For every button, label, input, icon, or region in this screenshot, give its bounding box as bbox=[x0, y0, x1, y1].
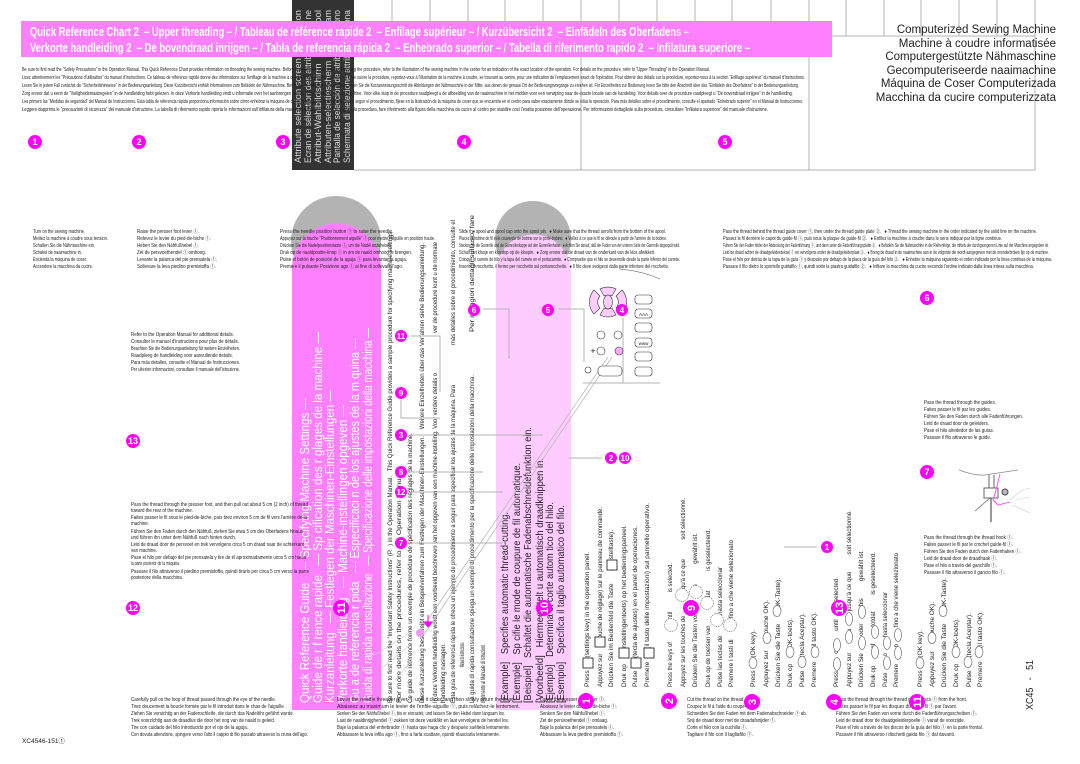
step numbers: rotated circles: 13 bbox=[834, 602, 846, 614]
step numbers: rotated circles: 4 bbox=[829, 698, 841, 705]
step 7 text: Passare il filo attraverso il gancio filo ①. bbox=[924, 568, 1005, 576]
operation panel illustration: + bbox=[590, 346, 596, 356]
rotated text: settings key: Druk op (instellingentoets) op het bedieningspaneel. bbox=[621, 525, 628, 687]
step 4 text: Coloque el carrete de hilo y la tapa del carrete en el portacarrete. ● Compruebe que el hilo se desenrolle desde la parte inferior del carrete. bbox=[459, 257, 680, 263]
callout numbers on illustration: 8 bbox=[399, 468, 404, 477]
rotated text: OK key second block: Druk op (OK-toets). bbox=[953, 618, 960, 687]
step 2 text: Zet de persvoethendel ① omhoog. bbox=[137, 248, 206, 256]
step numbers: rotated circles: 3 bbox=[747, 699, 759, 705]
step numbers: upright circles: 2 bbox=[136, 137, 142, 147]
rotated text: dial keys: Appuyez sur les touches de jusqu'à ce que soit sélectionné. bbox=[680, 498, 687, 687]
rotated text: OK key second block bbox=[917, 578, 984, 687]
operation manual note: Consulter le manuel d'instructions pour plus de détails. bbox=[131, 339, 239, 345]
step 6 text: Führen Sie den Faden durch alle Fadenführungen. bbox=[924, 414, 1023, 420]
step 1 text: Schakel de naaimachine in. bbox=[33, 250, 82, 256]
thread path arrow marker bbox=[375, 615, 432, 680]
callout numbers on illustration: 2 bbox=[609, 454, 614, 463]
callout numbers on illustration: 5 bbox=[546, 306, 551, 315]
rotated text: OK key second block: Pulse (tecla Aceptar). bbox=[966, 613, 973, 687]
step 13 text: Faites passer le fil sous le pied-de-biche, puis tirez environ 5 cm de fil vers l'arrière de la bbox=[131, 515, 307, 521]
title banner: Verkorte handleiding 2 – De bovendraad inrijgen – / Tabla de referencia rápida 2 – Enhebrado superior – / Tabella di riferimento rapido 2 – Infilatura superiore – bbox=[30, 41, 750, 55]
needle threader text bbox=[337, 695, 520, 738]
thread cutter text bbox=[687, 695, 807, 738]
light pink pill with grey arc: example: [Example] Specifies automatic thread-cutting. bbox=[499, 512, 511, 703]
rotated text: dial keys: Pulse las teclas de hasta seleccionar bbox=[717, 566, 724, 687]
presser foot lever text: Abbassare la leva piedino premistoffa ①. bbox=[540, 730, 623, 738]
rotated introduction text bbox=[387, 215, 487, 703]
step 1 text: Encienda la máquina de coser. bbox=[33, 257, 87, 263]
step 2 text: Levante la palanca del pie prensatela ①. bbox=[137, 255, 217, 263]
rotated text: arrow keys: Drücken Sie oder bis gewählt ist. bbox=[858, 550, 865, 687]
step 2 text: Relevez le levier du pied-de-biche ①. bbox=[137, 234, 211, 242]
step 1 text bbox=[33, 229, 108, 270]
callout numbers on illustration: 12 bbox=[397, 488, 406, 497]
rotated text: arrow keys: Druk op of totdat is geselecteerd. bbox=[870, 552, 877, 687]
needle threader text: Laat de naaldinrijghendel ① zakken tot deze vastklikt en laat vervolgens de hendel los. bbox=[337, 716, 509, 724]
machine title: Computerized Sewing Machine bbox=[897, 24, 1056, 36]
rotated text: OK key first block: Druk op (OK-toets). bbox=[787, 618, 794, 687]
machine title: Máquina de Coser Computerizada bbox=[881, 78, 1057, 90]
rotated text: arrow keys: Press or until selected. bbox=[833, 577, 840, 687]
step 12 text: Trek voorzichtig aan de draadlus die door het oog van de naald is geleid. bbox=[131, 718, 275, 724]
step 6 text bbox=[924, 400, 1023, 441]
step 3 text: Appuyez sur la touche “Positionnement aiguille” ① pour mettre l'aiguille en position haute. bbox=[280, 234, 435, 242]
step 13 text bbox=[131, 502, 309, 581]
needle threader text: Senken Sie den Nähfußhebel ①, bis er einrastet, und lassen Sie den Hebel dann langsam los. bbox=[337, 709, 505, 717]
rotated introduction text: Manual de instrucciones. bbox=[459, 642, 466, 667]
pink pill with grey arc: machine settings: Guide de r f rence rapide — Sp cification des r glages de la machine — bbox=[310, 332, 325, 703]
crop grid lines bbox=[354, 0, 1035, 170]
presser foot lever text: Zet de persvoethendel ① omlaag. bbox=[540, 716, 608, 724]
pink pill with grey arc: machine settings: Guida di rapida consultazione — Specificazione delle impostazioni della macchina — bbox=[360, 328, 375, 703]
step 1 text: Turn on the sewing machine. bbox=[33, 229, 85, 235]
operation manual note bbox=[131, 332, 240, 373]
step 4 text: Stecken Sie die Garnrolle und die Garnrollenkappe auf den Garnrollenhalter. ● Achten Sie darauf, daß der Faden von der unteren Seite der Garnrolle abgespult wird. bbox=[459, 243, 680, 249]
callout numbers on illustration: 1 bbox=[825, 543, 830, 552]
step 2 text: Sollevare la leva piedino premistoffa ①. bbox=[137, 262, 216, 270]
intro text: Be sure to first read the “Safety Precautions” in the Operation Manual. This Quick Reference Chart provides information on threading the sewing machine. Before threading the machine and following the procedure, refer to the illustration of the sewing machine in the center for an indication of the exact location of the operation. For details on the procedure, refer to “Upper Threading” in the Operation Manual. bbox=[22, 67, 710, 73]
operation manual note: Per ulteriori informazioni, consultare il manuale dell'istruzione. bbox=[131, 367, 240, 373]
needle threader text: Abbassare la leva infila ago ①, fino a farla scattare, quindi rilasciarla lentamente. bbox=[337, 730, 500, 738]
step 5 text: Passez le fil derrière le capot du guide-fil ①, puis sous la plaque du guide-fil ②. ● Enfilez la machine à coudre dans le sens indiqué par la ligne continue. bbox=[723, 234, 1002, 242]
step 3 text: Drücken Sie die Nadelpositionstaste ①, um die Nadel anzuheben. bbox=[280, 241, 392, 249]
step 4 text: Placez la bobine de fil et le couvercle de bobine sur le porte-bobine. ● Veillez à ce que le fil se déroule à partir de l'arrière de la bobine. bbox=[459, 236, 667, 242]
step 7 text: Pase el hilo a través del ganchillo ①. bbox=[924, 561, 997, 569]
step numbers: upright circles: 5 bbox=[722, 137, 728, 147]
step 13 text: Passare il filo attraverso il piedino premistoffa, quindi tirarlo per circa 5 cm verso la parte bbox=[131, 569, 309, 575]
rotated introduction text: For more details on the procedures, refer to the Operation Manual. bbox=[396, 470, 403, 703]
rotated introduction text: Per maggiori dettagli sull'uso, fare bbox=[469, 215, 476, 332]
rotated text: arrow keys bbox=[833, 510, 900, 687]
machine title: Macchina da cucire computerizzata bbox=[876, 92, 1057, 104]
step 7 text: Faites passer le fil par le crochet guide-fil ①. bbox=[924, 540, 1013, 548]
step 13 text: Pass the thread through the presser foot, and then pull out about 5 cm (2 inch) of thread bbox=[131, 502, 308, 508]
operation manual note: Refer to the Operation Manual for additional details. bbox=[131, 332, 234, 338]
step numbers: upright circles: 4 bbox=[461, 137, 467, 147]
step 13 text: van machine. bbox=[131, 548, 157, 554]
icons: settings key bbox=[583, 560, 654, 668]
pink pill with grey arc: machine settings: Gu a de referencia r pida — Especificaci n de los ajustes de la m quina — bbox=[347, 338, 362, 703]
thread cutter text: Tagliare il filo con il tagliafilo ①. bbox=[687, 730, 753, 738]
callout numbers on illustration: 4 bbox=[620, 306, 625, 315]
step numbers: upright circles: 6 bbox=[924, 293, 930, 303]
step 13 text: und führen ihn unter dem Nähfuß nach hinten durch. bbox=[131, 535, 236, 541]
step 6 text: Faites passer le fil par les guides. bbox=[924, 407, 991, 413]
step numbers: rotated circles: 1 bbox=[581, 698, 593, 704]
thread guide discs text: Führen Sie den Faden von vorne durch die Fadenführungsscheiben ①. bbox=[836, 709, 977, 717]
step 13 text: toward the rear of the machine. bbox=[131, 508, 193, 514]
rotated text: OK key first block: Drücken Sie die Taste (OK-Taste). bbox=[775, 578, 782, 687]
pink pill with grey arc: machine settings: Kurzanleitung — Festlegen der Maschinen-Einstellungen — bbox=[322, 390, 337, 703]
rotated text: OK key first block: Premere (il tasto OK). bbox=[811, 612, 818, 687]
connector lines bbox=[401, 309, 817, 636]
rotated text: OK key first block: Press (OK key). bbox=[750, 630, 757, 687]
step 5 text bbox=[723, 227, 1052, 270]
icons: arrow keys bbox=[834, 606, 902, 670]
operation manual note: Beachten Sie die Bedienungsanleitung für weitere Einzelheiten. bbox=[131, 346, 240, 352]
thread guide discs text: Pass the thread through the thread guide discs ① from the front. bbox=[836, 695, 967, 703]
step 1 text: Schalten Sie die Nähmaschine ein. bbox=[33, 243, 95, 249]
rotated text: dial keys: Druk op de toetsen van totdat is geselecteerd. bbox=[705, 529, 712, 687]
title banner: Quick Reference Chart 2 – Upper threading – / Tableau de référence rapide 2 – Enfilage supérieur – / Kurzübersicht 2 – Einfädeln des Oberfadens – bbox=[30, 25, 689, 39]
step numbers: rotated circles: 10 bbox=[539, 602, 551, 614]
rotated text: settings key: Pulse (tecla de ajustes) en el panel de operaciones. bbox=[632, 526, 639, 687]
step 12 text: Ziehen Sie vorsichtig an der Fadenschleife, die durch das Nadelöhr geführt wurde. bbox=[131, 711, 294, 717]
rotated text: OK key second block: Premere (il tasto OK). bbox=[977, 611, 984, 687]
pink pill with grey arc: machine settings: Quick Reference Guide — Specifying Machine Settings — bbox=[297, 398, 312, 703]
callout numbers on illustration: 7 bbox=[399, 539, 404, 548]
rotated introduction text: La guida di rapida consultazione spiega un esempio di procedimento per la specificazione delle impostazioni della macchina. bbox=[469, 375, 476, 703]
rotated text: settings key bbox=[584, 503, 651, 687]
step 12 text: Con dovuta attenzione, spingere verso l'alto il cappio di filo passato attraverso la cruna dell'ago. bbox=[131, 732, 308, 738]
machine title bbox=[876, 24, 1057, 104]
presser foot lever text: Abaissez le levier du pied-de-biche ①. bbox=[540, 702, 617, 710]
rotated introduction text: handleiding naslagen. bbox=[440, 643, 447, 703]
rotated text: dial keys: Premere i tasti di fino a che viene selezionato bbox=[728, 540, 735, 687]
step 13 text: posteriore della macchina. bbox=[131, 575, 183, 581]
step 4 text: Slide the spool and spool cap onto the spool pin. ● Make sure that the thread unrolls from the bottom of the spool. bbox=[459, 229, 666, 235]
footer code: XC4546-151① bbox=[22, 737, 65, 745]
step numbers: rotated circles: 2 bbox=[664, 698, 676, 704]
step 13 text: machine. bbox=[131, 521, 149, 527]
step 7 text bbox=[924, 533, 1021, 576]
light pink pill with grey arc: example: [Esempio] Specifica il taglio automatico del filo. bbox=[555, 505, 567, 703]
step numbers: upright circles: 3 bbox=[280, 137, 286, 147]
step numbers: upright circles: 7 bbox=[924, 467, 930, 477]
step numbers: rotated circles: 9 bbox=[686, 605, 698, 611]
rotated introduction text: Esta guía de referencia rápida le ofrece un ejemplo de procedimiento a seguir para especificar los ajustes de la máquina. Para bbox=[450, 385, 457, 703]
step numbers: rotated circles: 11 bbox=[336, 602, 348, 614]
thread guide discs text: Leid de draad door de draadgeleiderpoelie ① vanaf de voorzijde. bbox=[836, 716, 965, 724]
panel: attribute selection screen bbox=[292, 0, 354, 170]
thread cutter text: Corte el hilo con la cuchilla ①. bbox=[687, 723, 747, 731]
presser foot lever text: Baje la palanca del pie prensatela ①. bbox=[540, 723, 614, 731]
title banner bbox=[21, 21, 832, 57]
step numbers: upright circles: 12 bbox=[128, 603, 138, 613]
step numbers: upright circles bbox=[28, 135, 934, 615]
rotated text: OK key first block: Pulse (tecla Aceptar). bbox=[799, 613, 806, 687]
step 3 text: Druk op de naaldpositie-knop ① in om de naald omhoog te brengen. bbox=[280, 248, 412, 256]
step 13 text: Pase el hilo por debajo del pie prensatela y tire de él aproximadamente unos 5 cm hacia bbox=[131, 555, 306, 561]
callout numbers on illustration: 6 bbox=[472, 306, 477, 315]
callout numbers on illustration: 9 bbox=[399, 389, 404, 398]
step numbers: upright circles: 13 bbox=[128, 436, 138, 446]
step 12 text: Carefully pull on the loop of thread passed through the eye of the needle. bbox=[131, 697, 276, 703]
rotated introduction text: ver de procedure kunt u de normale bbox=[432, 242, 439, 333]
panel: attribute selection screen: Attribut-Wahlbildschirm mbol bbox=[313, 10, 324, 163]
page number: XC45 - 51 bbox=[1024, 660, 1036, 710]
machine title: Machine à coudre informatisée bbox=[899, 38, 1056, 50]
thread guide discs text: Passare il filo attraverso i dischetti guida filo ① dal davanti. bbox=[836, 730, 955, 738]
operation manual note: Raadpleeg de handleiding voor aanvullende details. bbox=[131, 353, 233, 359]
step 13 text: Führen Sie den Faden durch den Nähfuß, ziehen Sie etwa 5 cm des Oberfadens hinaus bbox=[131, 529, 303, 535]
rotated introduction text: In deze Verkorte handleiding wordt een voorbeeld beschreven van het opgeven van een machine-instelling. Voor verdere details o bbox=[432, 373, 439, 703]
icons: dial keys bbox=[664, 586, 736, 632]
step 6 text: Leid de draad door de geleiders. bbox=[924, 421, 989, 427]
rotated introduction text: riferimento al Manuale di Istruzioni bbox=[480, 645, 487, 703]
operation panel illustration: www bbox=[639, 341, 649, 346]
step 13 text: Leid de draad door de persvoet en trek vervolgens circa 5 cm draad naar de achterkant bbox=[131, 542, 304, 548]
step numbers: rotated circles bbox=[333, 600, 925, 710]
thread cutter text: Snij de draad door met de draadafsnijder ①. bbox=[687, 716, 776, 724]
pink pill with grey arc: machine settings: Verkorte handleiding — Machine-instellingen opgeven — bbox=[335, 405, 350, 703]
step 12 text bbox=[131, 697, 308, 738]
rotated text: OK key second block: Press (OK key). bbox=[917, 630, 924, 687]
thread cutter text: Cut the thread on the thread cutter ①. bbox=[687, 695, 763, 703]
light pink pill with grey arc: example: [Beispiel] Schaltet die automatische Fadenabschneidefunktion ein. bbox=[522, 427, 534, 703]
callout numbers on illustration bbox=[395, 304, 833, 553]
illustration: needle and thread hook bbox=[959, 470, 1030, 522]
rotated text: settings key: Premere (il tasto delle impostazioni) sul pannello operativo. bbox=[644, 503, 651, 687]
callout numbers on illustration: 10 bbox=[621, 454, 630, 463]
presser foot lever text bbox=[540, 695, 623, 738]
rotated text: dial keys: Press the keys of until is selected. bbox=[667, 563, 674, 687]
intro text bbox=[22, 67, 805, 113]
rotated text: arrow keys: Appuyez sur ou jusqu'à ce que soit sélectionné. bbox=[846, 510, 853, 687]
light pink pill with grey arc: example: [Ejemplo] Determina el corte autom tico del hilo. bbox=[544, 502, 556, 703]
operation panel illustration bbox=[585, 269, 660, 376]
needle threader text: Baje la palanca del enhebrador ① hasta que haga clic y después suéltela lentamente. bbox=[337, 723, 510, 731]
thread guide discs text: Pase el hilo a través de los discos de la guía del hilo ① en la parte frontal. bbox=[836, 723, 983, 731]
needle threader text: Abaissez au maximum le levier de l'enfile-aiguille ①, puis relâchez-le lentement. bbox=[337, 702, 520, 710]
step 4 text: Inserire il rocchetto, il fermo per rocchetto sul portarocchetto. ● Il filo deve svolgersi dalla parte inferiore del rocchetto. bbox=[459, 264, 669, 270]
operation panel illustration: AAA bbox=[639, 312, 648, 317]
callout numbers on illustration: 11 bbox=[397, 332, 406, 341]
rotated text: OK key second block: Drücken Sie die Taste (OK-Taste). bbox=[941, 578, 948, 687]
rotated introduction text: Ce guide de référence forme un exemple de procédure de spécification des réglages de la machine. bbox=[407, 433, 414, 703]
step 3 text: Premere il pulsante Posizione ago ① al fine di sollevare l'ago. bbox=[280, 262, 403, 270]
step 3 text: Press the needle position button ① to raise the needle. bbox=[280, 227, 393, 235]
step 7 text: Führen Sie den Faden durch den Fadenhaken ①. bbox=[924, 547, 1021, 555]
step 7 text: Leid de draad door de draadhaak ①. bbox=[924, 554, 997, 562]
step numbers: upright circles: 1 bbox=[32, 137, 38, 147]
step 6 text: Pase el hilo alrededor de las guías. bbox=[924, 428, 994, 434]
rotated text: dial keys bbox=[667, 498, 735, 687]
machine title: Computergestützte Nähmaschine bbox=[885, 51, 1056, 63]
step numbers: rotated circles: 11 bbox=[912, 696, 924, 708]
rotated text: OK key first block bbox=[750, 578, 818, 687]
thread cutter text: Schneiden Sie den Faden mit dem Fadenabschneider ① ab. bbox=[687, 709, 807, 717]
thread cutter text: Coupez le fil à l'aide du coupe-fil ①. bbox=[687, 702, 756, 710]
step 1 text: Accendere la macchina da cucire. bbox=[33, 264, 93, 270]
presser foot lever text: Lower the presser foot lever ①. bbox=[540, 695, 605, 703]
step 2 text: Raise the presser foot lever ①. bbox=[137, 227, 199, 235]
pink pill with grey arc: machine settings bbox=[291, 196, 381, 710]
rotated text: settings key: Drücken Sie im Bedienfeld die Taste (Einstelltaste). bbox=[608, 530, 615, 687]
panel: attribute selection screen: Attributen-selectiescherm ogram bbox=[323, 10, 334, 163]
rotated text: OK key first block: Appuyez sur (touche OK). bbox=[763, 600, 770, 687]
rotated text: arrow keys: Premere o fino a che viene selezionato bbox=[893, 553, 900, 687]
step 1 text: Mettez la machine à coudre sous tension. bbox=[33, 236, 108, 242]
rotated introduction text: Be sure to first read the “Important Safety Instructions” (P. ) in the Operation Manual. This Quick Reference Guide provides a sample procedure for specifying machine settings. bbox=[387, 230, 394, 703]
rotated text: settings key: Press (settings key) in the operation panel. bbox=[584, 552, 591, 687]
rotated text: settings key: Appuyez sur (touche de réglage) sur le panneau de commande. bbox=[597, 507, 604, 687]
rotated introduction text: más detalles sobre el procedimiento, consulte el bbox=[450, 220, 457, 345]
step 2 text bbox=[137, 227, 217, 270]
step 6 text: Pass the thread through the guides. bbox=[924, 400, 996, 406]
callout numbers on illustration: 3 bbox=[399, 431, 404, 440]
step 2 text: Heben Sie den Nähfußhebel ①. bbox=[137, 241, 199, 249]
light pink pill with grey arc: example bbox=[495, 201, 571, 710]
step 13 text: la parte posterior de la máquina. bbox=[131, 561, 180, 567]
step 7 text: Pass the thread through the thread hook ①. bbox=[924, 533, 1013, 541]
step 3 text bbox=[280, 227, 435, 270]
needle threader text: Lower the needle threader lever ① until it clicks, and then slowly return the lever. bbox=[337, 695, 515, 703]
thread guide discs text: Faites passer le fil par les disques du guide-fil ① par l'avant. bbox=[836, 702, 957, 710]
rotated introduction text: Diese Kurzanleitung beschreibt ein Beispielverfahren zum Festlegen der Maschinen-Einstellungen. Weitere Einzelheiten über das Verfahren siehe Bedienungsanleitung. bbox=[419, 243, 426, 703]
thread guide discs text bbox=[836, 695, 983, 738]
step 12 text: Tire con cuidado del hilo introducido por el ojo de la aguja. bbox=[131, 725, 248, 731]
presser foot lever text: Senken Sie den Nähfußhebel ①. bbox=[540, 709, 605, 717]
rotated text: dial keys: Drücken Sie die Tasten von bis gewählt ist. bbox=[692, 533, 699, 687]
light pink pill with grey arc: example: [Voorbeeld] Hiermee stelt u automatisch draadknippen in. bbox=[534, 458, 546, 703]
step 12 text: Tirez doucement la boucle formée par le fil introduit dans le chas de l'aiguille. bbox=[131, 704, 285, 710]
machine title: Gecomputeriseerde naaimachine bbox=[887, 65, 1056, 77]
rotated text: OK key second block: Appuyez sur (touche OK). bbox=[929, 602, 936, 687]
light pink pill with grey arc: example: [Exemple] Sp cifie le mode de coupure de fil automatique. bbox=[511, 463, 523, 703]
operation manual note: Para más detalles, consulte el Manual de Instrucciones. bbox=[131, 360, 240, 366]
step 3 text: Pulse el botón de posición de la aguja ① para levantar la aguja. bbox=[280, 255, 407, 263]
step 6 text: Passare il filo attraverso le guide. bbox=[924, 435, 991, 441]
intro text: Leggere dapprima le “precauzioni di sicurezza” del manuale d'istruzione. La tabella di riferimento rapido riporta le informazioni sull'infilatura della macchina da cucire. Prima di seguire la procedura, fare riferimento alla figura della macchina da cucire al centro per stabilire così l'esatta posizione dell'operazione. Per informazioni dettagliate sulla procedura, consultare “Infilatura superiore” del manuale d'istruzione. bbox=[22, 107, 768, 113]
rotated text: arrow keys: Pulse o hasta seleccionar bbox=[882, 591, 889, 687]
step 4 text: Schuif het klosje en klosdop op de klospin. ● Zorg ervoor dat de draad van de onderkant van de klos afwikkelt. bbox=[459, 250, 655, 256]
panel: attribute selection screen: Attribute selection screen icon bbox=[293, 10, 304, 163]
step 4 text bbox=[459, 229, 680, 270]
icons: OK keys bbox=[749, 606, 983, 668]
intro text: Zorg ervoor dat u eerst de “Veiligheidsmaatregelen” in de handleiding hebt gelezen. In deze Verkorte handleiding vindt u informatie over het aanbrengen van de bovendraad op de naaimachine. Voor elke stap in de procedure raadpleegt u de afbeelding van de naaimachine in het midden voor een verwijzing naar de exacte locatie van de handeling. Voor details over de procedure raadpleegt u “De bovendraad inrijgen” in de handleiding. bbox=[22, 91, 793, 97]
